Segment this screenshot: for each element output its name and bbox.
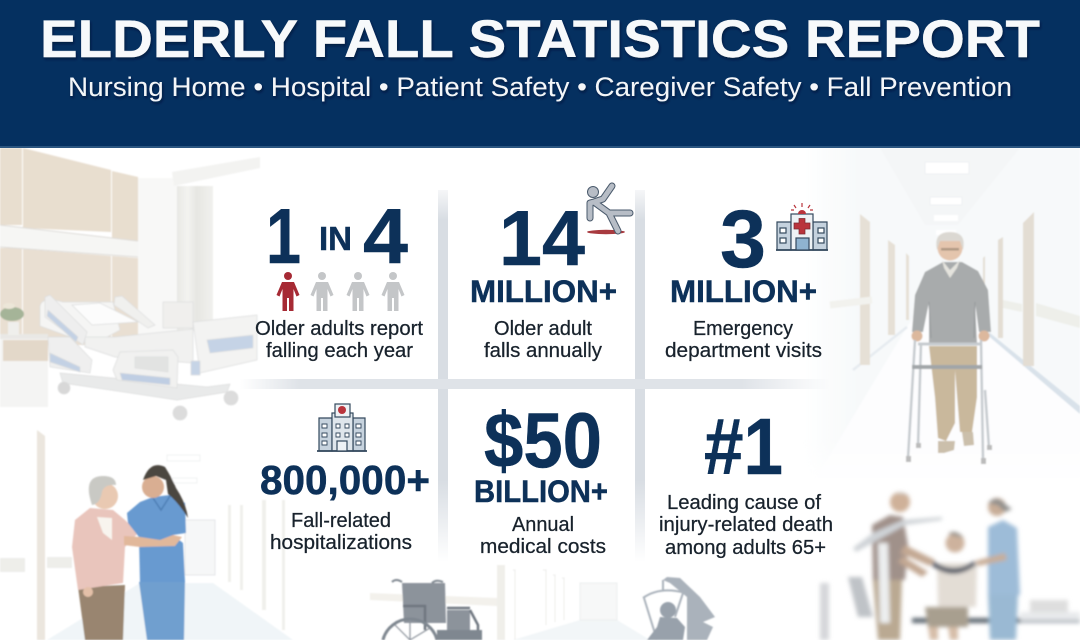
card: 1 in 4: IN — [319, 220, 352, 257]
older woman — [72, 476, 138, 640]
icon: hospital building — [317, 404, 367, 451]
card: 3 million: department visits — [665, 339, 822, 362]
patient lift silhouette — [643, 577, 715, 640]
card: 3 million: MILLION+ — [670, 273, 817, 309]
card: 14 million: 14 — [499, 194, 585, 282]
nurse in blue scrubs — [124, 465, 188, 640]
card: $50 billion: medical costs — [480, 535, 606, 558]
card: 800,000 hospitalizations: Fall-related — [291, 509, 391, 532]
card: 1 in 4: falling each year — [266, 339, 413, 362]
card: #1 cause: injury-related death — [659, 513, 833, 536]
scene: corridor with elderly man and walker — [800, 148, 1080, 490]
subtitle: Nursing Home • Hospital • Patient Safety • Caregiver Safety • Fall Prevention — [68, 72, 1012, 102]
card: #1 cause — [659, 402, 833, 559]
card: 3 million: 3 — [720, 194, 766, 285]
icon: hospital with siren — [776, 203, 828, 250]
card: #1 cause: Leading cause of — [667, 491, 821, 514]
card: 800,000 hospitalizations: hospitalizations — [270, 531, 412, 554]
scene: hospital room with bed — [0, 148, 260, 420]
card: $50 billion: BILLION+ — [474, 473, 608, 509]
card: 1 in 4 — [255, 192, 423, 362]
icon: four people, one highlighted — [276, 272, 404, 311]
card: $50 billion: $50 — [484, 396, 602, 484]
card: 14 million: Older adult — [494, 317, 592, 340]
card: 1 in 4: Older adults report — [255, 317, 423, 340]
card: 1 in 4: 1 — [266, 192, 301, 280]
scene: blurred caregivers and patient lift — [820, 492, 1080, 640]
card: $50 billion: Annual — [512, 513, 574, 536]
scene: corridor with nurse and older woman — [0, 430, 293, 640]
card: 800,000 hospitalizations — [260, 404, 430, 554]
elderly man with walker — [906, 232, 992, 464]
card: #1 cause: #1 — [704, 402, 783, 491]
wheelchair — [383, 580, 482, 640]
title: ELDERLY FALL STATISTICS REPORT — [40, 10, 1040, 69]
card: $50 billion — [474, 396, 608, 558]
hospital bed — [40, 295, 257, 420]
statistic cards panel — [240, 186, 833, 562]
card: 14 million: falls annually — [484, 339, 603, 362]
card: 14 million: MILLION+ — [470, 273, 617, 309]
scene: wheelchair and corridor — [370, 565, 715, 640]
nightstand with plant — [0, 303, 48, 407]
header banner — [0, 0, 1080, 148]
icon: person falling — [587, 186, 630, 234]
card: 3 million: Emergency — [693, 317, 794, 340]
card: 14 million — [470, 186, 630, 362]
card: 800,000 hospitalizations: 800,000+ — [260, 457, 430, 503]
card: #1 cause: among adults 65+ — [665, 536, 826, 559]
card: 3 million — [665, 194, 828, 362]
card: 1 in 4: 4 — [363, 192, 408, 280]
